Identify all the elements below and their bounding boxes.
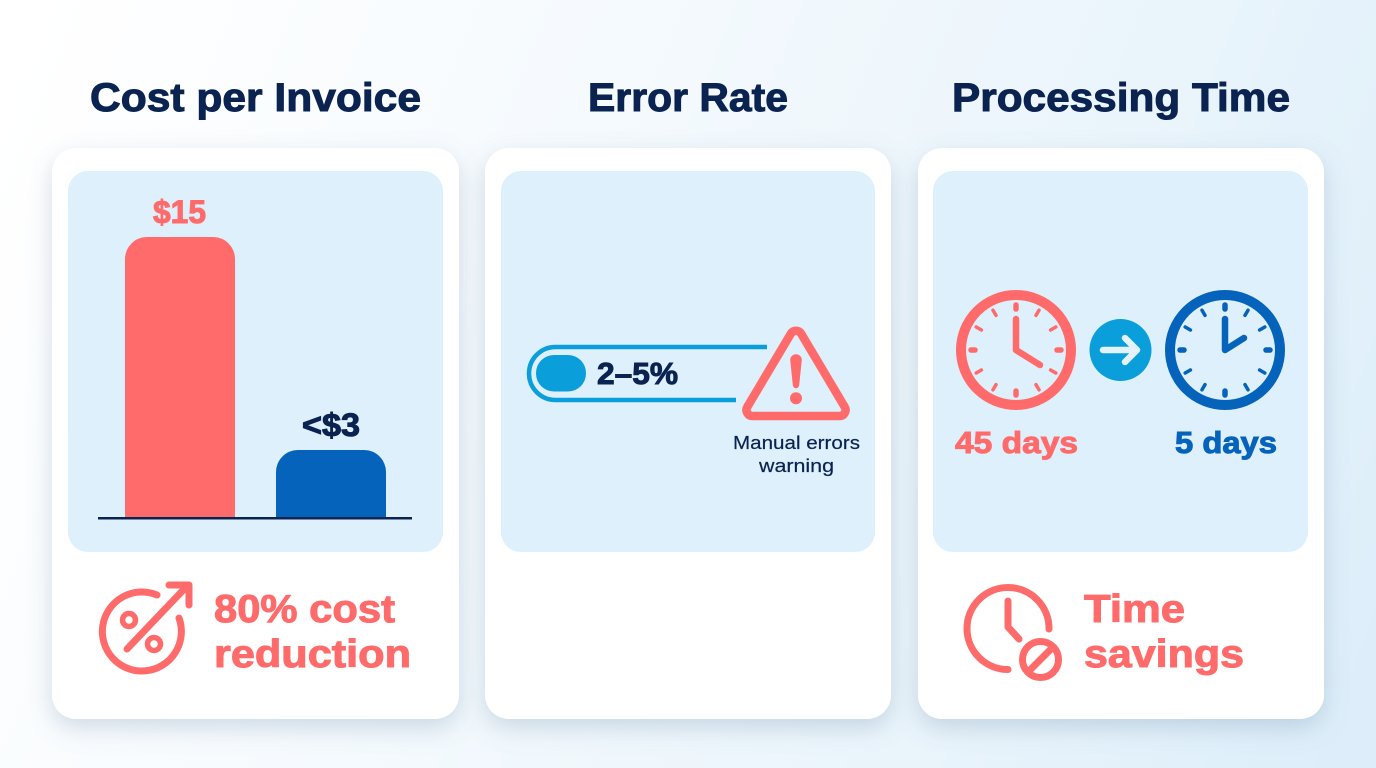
label: manual errors warning: Manual errors [733,432,860,453]
label: manual errors warning [733,432,860,476]
callout: 80% cost reduction [214,588,411,676]
bar: under $3 [276,450,386,518]
heading: Cost per Invoice: Cost per Invoice [90,76,421,120]
panel: cost per invoice card [52,148,459,719]
icon: red clock, 45 days [961,295,1071,405]
callout: time savings: Time [1084,588,1185,631]
icon: percent with rising arrow [102,585,189,671]
panel: error rate card [485,148,891,719]
icon: clock with ban symbol [967,588,1058,678]
panel: processing time card [918,148,1324,719]
bar chart: cost per invoice [98,194,412,520]
label: manual errors warning: warning [758,455,834,476]
icon: arrow in circle [1090,319,1152,381]
heading: Processing Time: Processing Time [952,76,1290,120]
progress bar: 2-5%: 2–5% [597,356,678,391]
label: 5 days: 5 days [1175,425,1277,460]
label: 45 days: 45 days [955,425,1078,460]
bar: $15 [125,237,235,518]
value label: under $3: <$3 [302,407,360,443]
callout: 80% cost reduction: 80% cost [214,588,395,631]
callout: 80% cost reduction: reduction [214,633,411,676]
chart baseline [98,517,412,520]
icon: blue clock, 5 days [1170,295,1280,405]
icon: warning triangle [746,331,846,416]
progress bar: 2-5% [529,347,767,400]
callout: time savings [1084,588,1244,676]
heading: Error Rate: Error Rate [588,76,788,120]
value label: $15: $15 [153,194,206,230]
callout: time savings: savings [1084,633,1244,676]
